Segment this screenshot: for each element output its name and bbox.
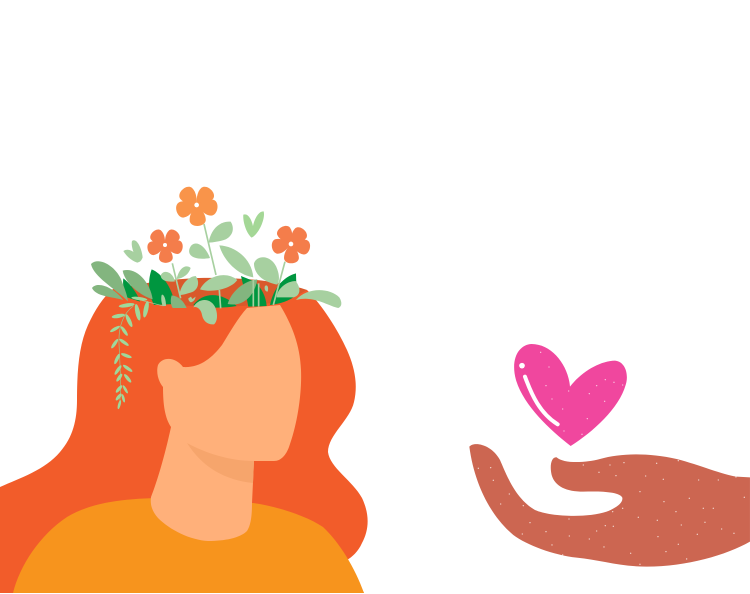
hair (0, 278, 368, 593)
neck shadow (187, 443, 254, 483)
flower: left (146, 227, 184, 263)
head opening (115, 278, 307, 307)
flower: right (271, 224, 311, 264)
plants growing from head (91, 184, 341, 409)
shirt (13, 498, 364, 593)
heart highlight stroke (525, 377, 558, 424)
heart and hand (469, 344, 750, 567)
hanging vine (109, 296, 150, 409)
hand (469, 444, 750, 567)
flower: top centre (174, 184, 219, 227)
small leaf upper right (243, 211, 264, 238)
heart (514, 344, 627, 446)
dark green leaves (123, 269, 297, 308)
face and neck (151, 305, 301, 541)
pale green leaves (123, 222, 341, 324)
mid green leaves (91, 261, 257, 308)
heart highlight dot (519, 363, 525, 368)
woman figure (0, 278, 368, 593)
stems (140, 224, 285, 308)
heart speckles (540, 352, 623, 435)
hand speckles (478, 460, 745, 565)
